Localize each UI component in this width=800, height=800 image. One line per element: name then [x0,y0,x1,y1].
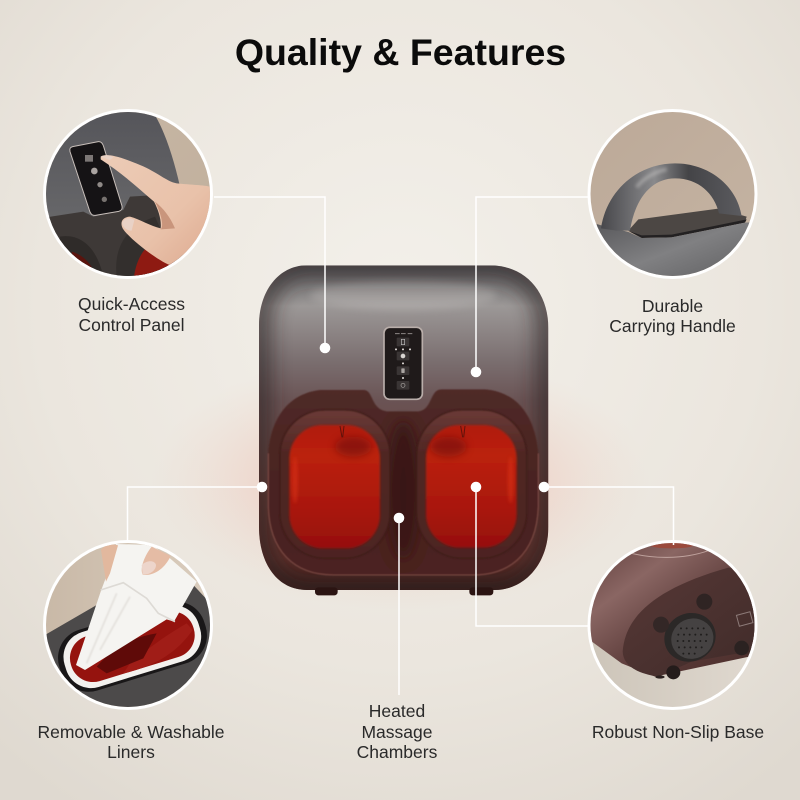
rubber feet [696,594,712,610]
device top [46,586,210,707]
control panel [384,327,422,399]
label: heated massage chambers: Massage [361,722,433,742]
label: durable carrying handle: Durable [642,296,703,316]
label: heated massage chambers: Heated [369,701,425,721]
circle: carrying handle close-up [588,109,758,279]
circle: non-slip base close-up [588,540,758,710]
callout lines and dots [128,197,674,695]
label: heated massage chambers: Chambers [357,742,438,762]
label: robust non-slip base: Robust Non-Slip Base [592,722,764,742]
title: Quality & Features [235,31,566,73]
fingers [101,545,118,582]
handle arch [601,163,742,231]
label: quick-access control panel: Quick-Access [78,294,185,314]
grip pad [664,613,716,662]
base plate [623,568,765,677]
circle: control panel close-up [43,109,213,279]
recessed foot well [268,389,538,575]
circle: washable liner close-up [43,540,213,710]
lid plate [628,209,747,237]
label: removable and washable liners: Removable & Washable [37,722,225,742]
product: foot massager [257,263,552,595]
device shell [585,543,765,677]
right chamber [417,410,527,558]
panel and hand in control close-up [70,142,212,266]
left chamber [280,410,390,558]
label: removable and washable liners: Liners [107,742,155,762]
cloth liner [76,544,197,670]
label: durable carrying handle: Carrying Handle [609,316,736,336]
label: quick-access control panel: Control Panel [78,315,185,335]
feet [315,587,493,595]
device body [257,263,552,592]
